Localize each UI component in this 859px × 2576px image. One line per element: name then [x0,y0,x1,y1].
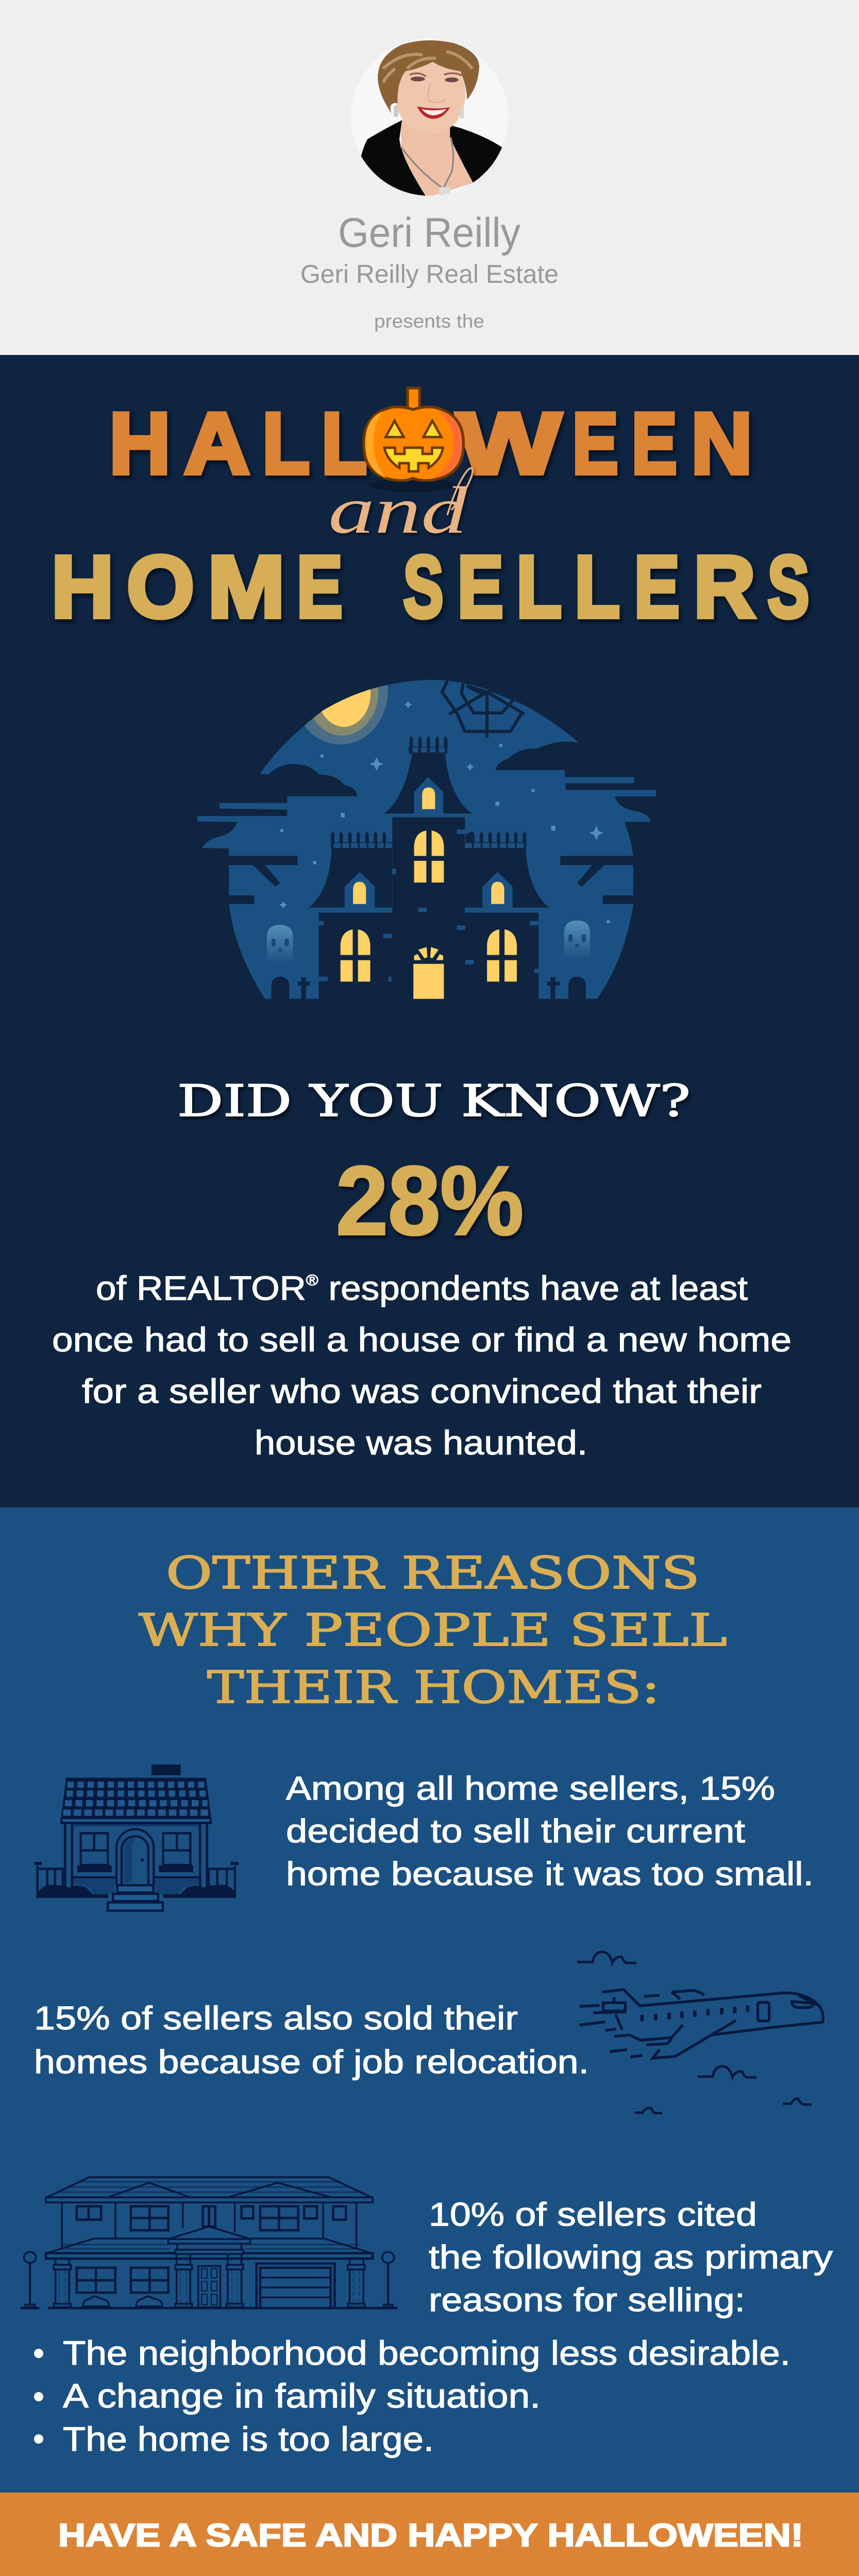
mansion body [309,736,549,999]
title: and [328,468,473,548]
company name: Geri Reilly Real Estate [300,260,559,289]
lit windows and door [341,787,517,999]
text: job relocation: homes because of job relocation. [34,2043,589,2080]
tombstones and crosses [272,977,586,999]
title: Halloween: N [691,395,752,492]
bullet list of reasons: A change in family situation. [63,2377,541,2415]
title: Home Sellers [52,538,810,636]
statistic description [52,1269,791,1462]
icon: jack-o-lantern pumpkin [364,388,463,492]
text: too small [286,1770,814,1892]
title: Home Sellers: S [768,538,809,636]
panel: presenter header [0,0,859,355]
title: Home Sellers: E [634,538,680,636]
cloud-side branches [229,856,633,904]
text: primary reasons [429,2196,833,2318]
statistic description: for a seller who was convinced that their [82,1372,762,1410]
title: Halloween: E [632,395,677,492]
title: Home Sellers: M [208,538,285,636]
title: Halloween: L [262,395,310,492]
title: Home Sellers: S [403,538,443,636]
panel: other reasons [0,1507,859,2493]
bullet list of reasons: The home is too large. [63,2420,434,2458]
statistic description: once had to sell a house or find a new home [52,1320,791,1359]
agent portrait photo [361,40,502,196]
icon: large two-story house [21,2177,398,2308]
heading: other reasons why people sell their homes: WHY PEOPLE SELL [139,1605,727,1656]
bricks [392,869,396,874]
title: Home Sellers: L [575,538,620,636]
bullet list of reasons [34,2334,790,2458]
title: Halloween: H [109,395,171,492]
statistic description: house was haunted. [255,1423,587,1462]
title: Home Sellers: E [297,538,343,636]
spider web [442,681,525,738]
heading: other reasons why people sell their homes: OTHER REASONS [166,1548,700,1599]
text: primary reasons: reasons for selling: [429,2281,745,2318]
title: Halloween: E [572,395,618,492]
title: Halloween: W [457,395,561,492]
heading: did you know: DID YOU KNOW? [177,1076,690,1126]
text: job relocation [34,1999,589,2080]
statistic: 28%: 28% [336,1146,524,1256]
title: Home Sellers: L [516,538,562,636]
statistic description: ® [306,1272,318,1289]
title: Halloween: A [184,395,249,492]
heading: other reasons why people sell their homes [139,1548,727,1714]
stars [279,701,610,923]
fences [409,736,447,754]
text: job relocation: 15% of sellers also sold their [34,1999,518,2037]
title: Halloween [109,395,752,492]
title: Home Sellers: H [52,538,114,636]
bullet list of reasons: The neighborhood becoming less desirable. [63,2334,790,2372]
heading: other reasons why people sell their homes: THEIR HOMES: [207,1662,660,1714]
title: and: and [328,473,468,548]
icon: small house [35,1765,239,1911]
statistic description: respondents have at least [318,1269,748,1307]
ghosts [267,921,590,963]
illustration: haunted house [197,680,656,999]
icon: airplane with clouds [577,1952,823,2113]
presents the: presents the [374,311,484,332]
statistic description: of REALTOR [96,1269,291,1307]
text: primary reasons: 10% of sellers cited [429,2196,757,2233]
presenter name: Geri Reilly [338,210,520,256]
text: primary reasons: the following as primary [429,2239,833,2276]
title: Home Sellers: O [127,538,194,636]
title: Home Sellers: E [458,538,503,636]
text: too small: Among all home sellers, 15% [286,1770,775,1807]
banner: have a safe and happy halloween: HAVE A SAFE AND HAPPY HALLOWEEN! [58,2518,803,2553]
title: Halloween: L [322,395,367,492]
panel: title and did you know [0,355,859,1507]
banner: have a safe and happy halloween [0,2493,859,2576]
title: Home Sellers: R [694,538,755,636]
text: too small: home because it was too small. [286,1855,814,1892]
text: too small: decided to sell their current [286,1812,745,1850]
